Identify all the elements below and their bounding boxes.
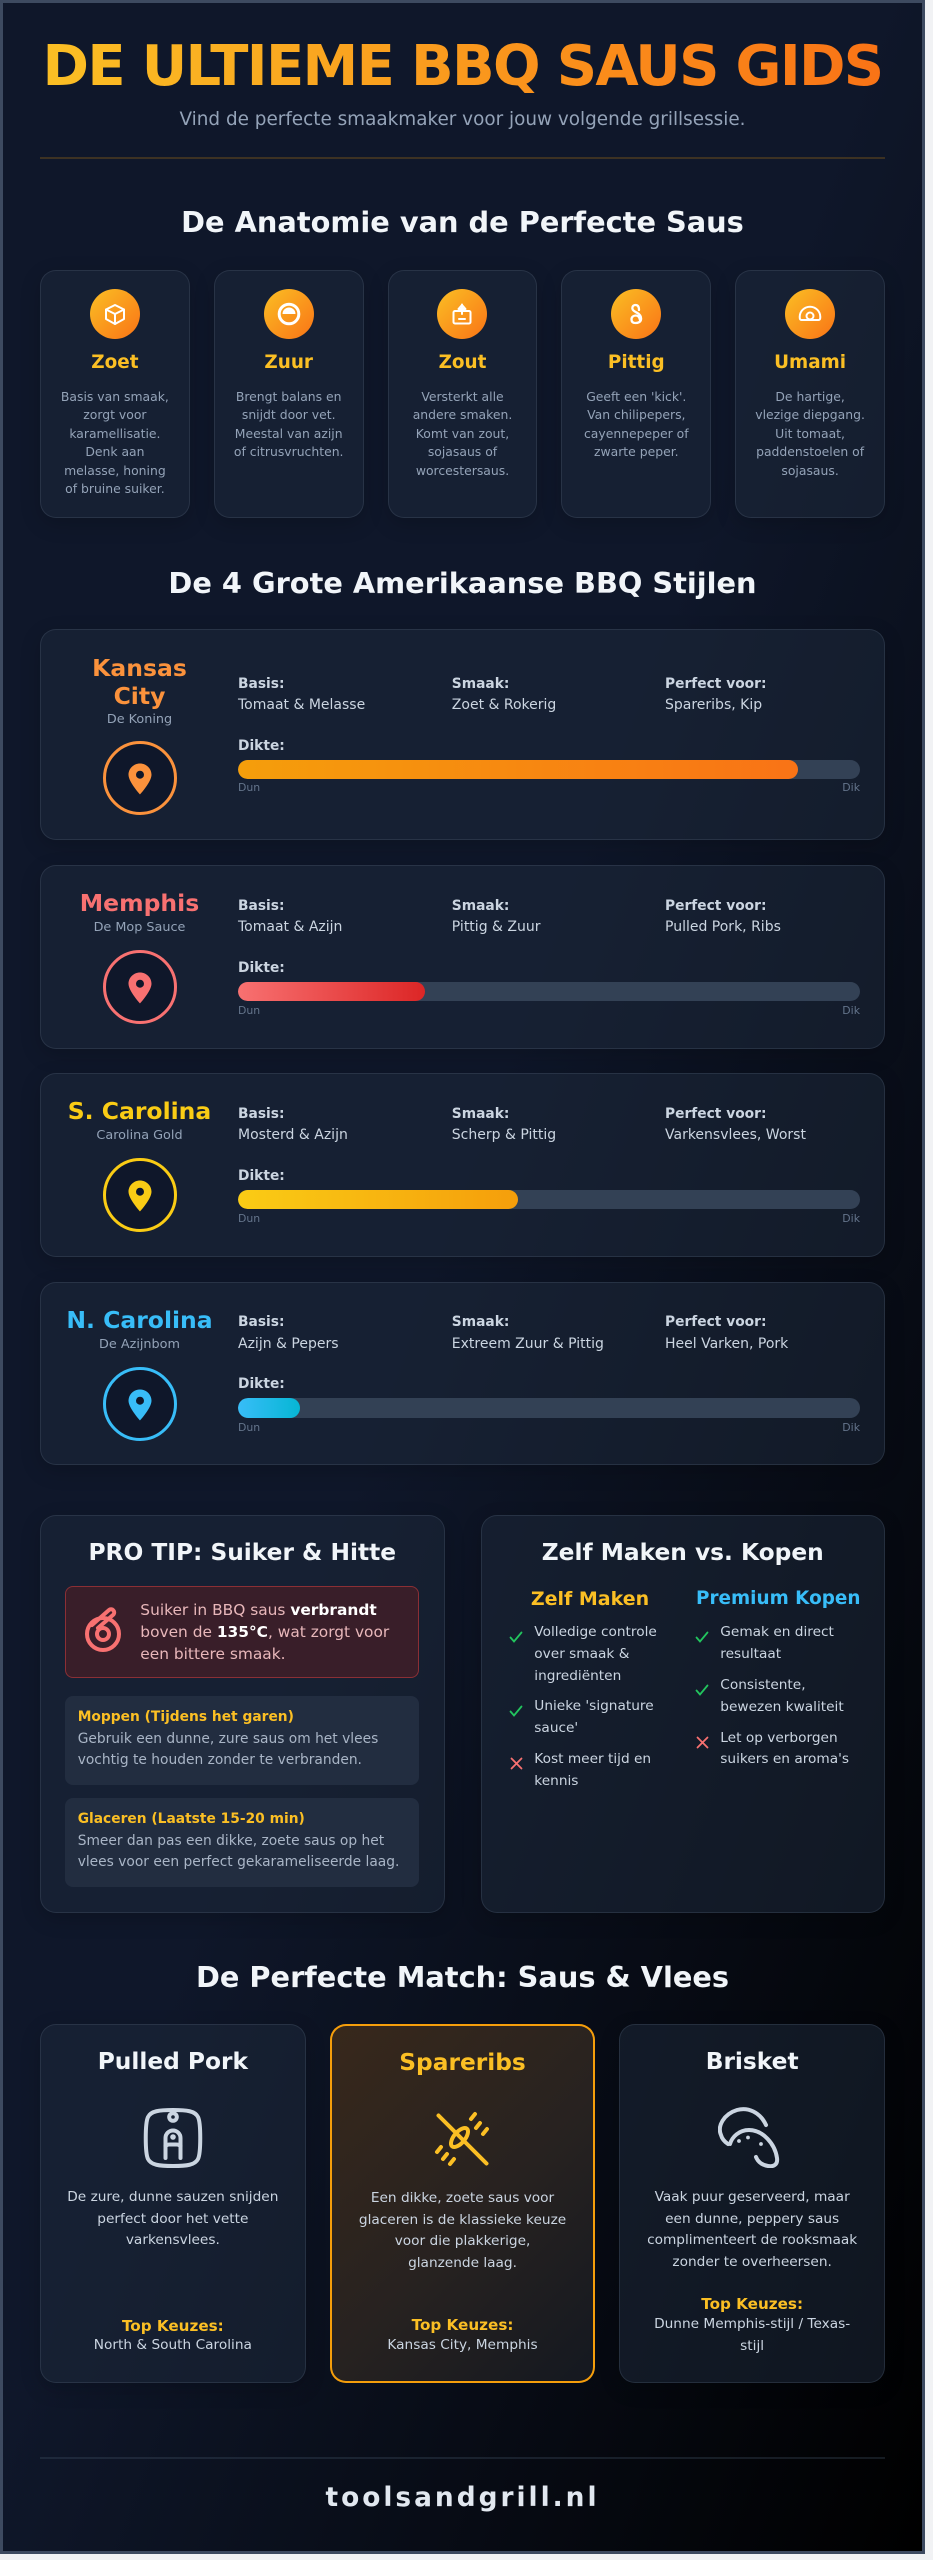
- panel: Memphis: Pulled Pork, Ribs: [665, 919, 781, 935]
- panel: spareribs: Kansas City, Memphis: [387, 2337, 538, 2353]
- panel: South Carolina: Perfect voor:: [665, 1106, 766, 1122]
- heading: styles: De 4 Grote Amerikaanse BBQ Stijlen: [168, 566, 757, 600]
- panel: make vs buy: [480, 1515, 885, 1913]
- panel: Kansas City: Zoet & Rokerig: [452, 697, 556, 713]
- check: [510, 1632, 522, 1643]
- panel: Zuur: of citrusvruchten.: [234, 444, 344, 459]
- panel: South Carolina: Mosterd & Azijn: [238, 1127, 348, 1143]
- column heading: make: Zelf Maken: [531, 1588, 649, 1610]
- icon: pulled pork: [144, 2108, 202, 2168]
- panel: pulled pork: [40, 2024, 306, 2383]
- callout text: [140, 1601, 390, 1663]
- panel: Zuur: [214, 270, 364, 518]
- panel: Memphis: Dun: [238, 1004, 260, 1017]
- panel: Memphis: Dik: [842, 1004, 860, 1017]
- style name: [92, 654, 187, 710]
- panel: Umami: Uit tomaat,: [775, 426, 845, 441]
- panel: Zoet: melasse, honing: [64, 463, 166, 478]
- panel: Memphis: Smaak:: [452, 898, 509, 914]
- panel: Memphis: Dikte:: [238, 960, 285, 976]
- panel: Zout: Zout: [439, 352, 486, 373]
- panel: North Carolina: Dun: [238, 1421, 260, 1434]
- panel: North Carolina: Basis:: [238, 1314, 284, 1330]
- list: buy: [696, 1624, 849, 1767]
- thickness bar: [238, 760, 860, 779]
- panel: brisket: Brisket: [706, 2048, 799, 2075]
- panel: Memphis: De Mop Sauce: [94, 920, 185, 935]
- style name: Memphis: [80, 889, 199, 917]
- panel: Kansas City: De Koning: [107, 712, 172, 727]
- panel: Zoet: of bruine suiker.: [65, 481, 165, 496]
- icon: cube: [90, 289, 140, 339]
- panel: Zuur: Zuur: [264, 352, 313, 373]
- panel: Zout: andere smaken.: [413, 407, 512, 422]
- panel: North Carolina: Dik: [842, 1421, 860, 1434]
- icon: pin: [103, 1367, 177, 1441]
- panel: Umami: Umami: [774, 352, 846, 373]
- panel: Zout: worcestersaus.: [416, 463, 509, 478]
- list: buy: bewezen kwaliteit: [720, 1699, 844, 1715]
- panel: South Carolina: Dik: [842, 1212, 860, 1225]
- tip: mopping: [65, 1696, 419, 1785]
- panel: North Carolina: Heel Varken, Pork: [665, 1336, 788, 1352]
- check: [510, 1706, 522, 1717]
- list: buy: Gemak en direct: [720, 1624, 834, 1640]
- panel: North Carolina: Dikte:: [238, 1376, 285, 1392]
- panel: spareribs: Een dikke, zoete saus voor: [371, 2190, 554, 2206]
- panel: spareribs: Top Keuzes:: [412, 2316, 513, 2334]
- panel: Zuur: Meestal van azijn: [235, 426, 343, 441]
- column heading: buy: Premium Kopen: [696, 1588, 860, 1609]
- callout text: Suiker in BBQ saus verbrandt: [140, 1601, 377, 1619]
- panel: North Carolina: [40, 1282, 885, 1465]
- panel: brisket: Vaak puur geserveerd, maar: [655, 2189, 850, 2205]
- panel: Umami: De hartige,: [775, 389, 845, 404]
- style name: N. Carolina: [66, 1306, 213, 1334]
- list: buy: suikers en aroma's: [720, 1751, 849, 1767]
- icon: brisket: [718, 2107, 780, 2168]
- check: [696, 1632, 708, 1643]
- panel: South Carolina: Varkensvlees, Worst: [665, 1127, 806, 1143]
- panel: Umami: sojasaus.: [781, 463, 839, 478]
- panel: Pittig: Pittig: [608, 352, 665, 373]
- panel: Kansas City: Dik: [842, 781, 860, 794]
- title: DE ULTIEME BBQ SAUS GIDS: [43, 34, 882, 99]
- panel: Umami: vlezige diepgang.: [755, 407, 865, 422]
- icon: shaker: [437, 289, 487, 339]
- panel: North Carolina: Perfect voor:: [665, 1314, 766, 1330]
- panel: Zoet: Basis van smaak,: [61, 389, 169, 404]
- panel: pulled pork: perfect door het vette: [97, 2211, 248, 2227]
- panel: Umami: [735, 270, 885, 518]
- icon: ring: [264, 289, 314, 339]
- panel: South Carolina: [40, 1073, 885, 1257]
- panel: Umami: paddenstoelen of: [756, 444, 864, 459]
- panel: North Carolina: Smaak:: [452, 1314, 509, 1330]
- panel: brisket: een dunne, peppery saus: [665, 2211, 839, 2227]
- panel: Pittig: cayennepeper of: [584, 426, 689, 441]
- panel: spareribs: voor die plakkerige,: [395, 2233, 530, 2249]
- panel: Pittig: Geeft een 'kick'.: [586, 389, 686, 404]
- list: make: Volledige controle: [534, 1624, 657, 1640]
- list: make: [510, 1624, 657, 1789]
- list: make: over smaak &: [534, 1646, 629, 1662]
- panel: Kansas City: Basis:: [238, 676, 284, 692]
- panel: Memphis: Perfect voor:: [665, 898, 766, 914]
- footer brand: toolsandgrill.nl: [325, 2482, 600, 2513]
- check: [696, 1684, 708, 1696]
- tip: glazing: vlees voor een perfect gekarameliseerde laag.: [78, 1854, 399, 1870]
- panel: Pittig: zwarte peper.: [594, 444, 679, 459]
- panel: spareribs: glanzende laag.: [408, 2255, 517, 2271]
- tip: glazing: [65, 1798, 419, 1887]
- panel: North Carolina: Extreem Zuur & Pittig: [452, 1336, 604, 1352]
- panel: Zout: sojasaus of: [428, 444, 497, 459]
- tip: glazing: Glaceren (Laatste 15-20 min): [78, 1811, 305, 1827]
- panel: Zoet: Zoet: [91, 352, 139, 373]
- panel: spareribs: glaceren is de klassieke keuze: [359, 2212, 566, 2228]
- panel: Kansas City: Dun: [238, 781, 260, 794]
- panel: pulled pork: Pulled Pork: [98, 2048, 248, 2075]
- panel: Memphis: [40, 865, 885, 1049]
- icon: pin: [103, 1158, 177, 1232]
- list: make: kennis: [534, 1773, 578, 1789]
- pro tip heading: PRO TIP: Suiker & Hitte: [88, 1539, 396, 1566]
- icon: pin: [103, 741, 177, 815]
- panel: brisket: complimenteert de rooksmaak: [647, 2232, 857, 2248]
- panel: brisket: zonder te overheersen.: [672, 2254, 832, 2270]
- tip: glazing: Smeer dan pas een dikke, zoete saus op het: [78, 1833, 384, 1849]
- icon: mushroom: [785, 289, 835, 339]
- subtitle: Vind de perfecte smaakmaker voor jouw volgende grillsessie.: [179, 109, 746, 130]
- panel: Kansas City: Perfect voor:: [665, 676, 766, 692]
- tip: mopping: vochtig te houden zonder te verbranden.: [78, 1752, 362, 1768]
- panel: North Carolina: De Azijnbom: [99, 1336, 180, 1352]
- panel: South Carolina: Smaak:: [452, 1106, 509, 1122]
- list: make: sauce': [534, 1720, 578, 1736]
- panel: South Carolina: Scherp & Pittig: [452, 1127, 556, 1143]
- heading: anatomy: De Anatomie van de Perfecte Saus: [181, 205, 744, 239]
- icon: ribs: [434, 2112, 490, 2166]
- panel: Zout: Versterkt alle: [421, 389, 504, 404]
- list: buy: Let op verborgen: [720, 1730, 838, 1746]
- list: make: Unieke 'signature: [534, 1698, 654, 1714]
- panel: Kansas City: Dikte:: [238, 738, 285, 754]
- cross: [510, 1758, 522, 1770]
- callout text: een bittere smaak.: [140, 1645, 286, 1663]
- panel: Memphis: Pittig & Zuur: [452, 919, 540, 935]
- panel: Pittig: [561, 270, 711, 518]
- panel: brisket: [619, 2024, 885, 2383]
- panel: pulled pork: Top Keuzes:: [122, 2317, 224, 2335]
- panel: South Carolina: Dikte:: [238, 1168, 285, 1184]
- list: buy: resultaat: [720, 1646, 781, 1662]
- list: buy: Consistente,: [720, 1677, 806, 1693]
- icon: chili: [611, 289, 661, 339]
- panel: Zout: [388, 270, 537, 518]
- panel: South Carolina: Carolina Gold: [96, 1128, 183, 1143]
- style name: S. Carolina: [68, 1097, 211, 1125]
- thickness bar: [238, 1398, 860, 1418]
- panel: Zoet: zorgt voor: [83, 407, 146, 422]
- panel: pulled pork: De zure, dunne sauzen snijden: [67, 2189, 278, 2205]
- panel: Zuur: Brengt balans en: [236, 389, 342, 404]
- panel: South Carolina: Dun: [238, 1212, 260, 1225]
- panel: Kansas City: Smaak:: [452, 676, 509, 692]
- panel: Zoet: Denk aan: [85, 444, 144, 459]
- panel: brisket: Top Keuzes:: [701, 2295, 803, 2313]
- panel: Memphis: Basis:: [238, 898, 284, 914]
- heading: match: De Perfecte Match: Saus & Vlees: [196, 1960, 729, 1994]
- panel: North Carolina: Azijn & Pepers: [238, 1336, 339, 1352]
- panel: Zoet: [40, 270, 190, 518]
- list: make: ingrediënten: [534, 1668, 621, 1684]
- panel: pulled pork: North & South Carolina: [94, 2337, 252, 2353]
- thickness bar: [238, 982, 860, 1001]
- icon: burner: [85, 1607, 121, 1652]
- callout: burning sugar: [65, 1586, 419, 1678]
- panel: Zoet: karamellisatie.: [69, 426, 160, 441]
- panel: Kansas City: Spareribs, Kip: [665, 697, 762, 713]
- panel: spareribs: Spareribs: [399, 2049, 526, 2076]
- panel: brisket: Dunne Memphis-stijl / Texas-: [654, 2316, 850, 2332]
- panel: spareribs: [330, 2024, 595, 2383]
- panel: Pittig: Van chilipepers,: [587, 407, 685, 422]
- panel: South Carolina: Basis:: [238, 1106, 284, 1122]
- panel: pulled pork: varkensvlees.: [126, 2232, 220, 2248]
- callout text: boven de 135°C, wat zorgt voor: [140, 1623, 389, 1641]
- style name: Kansas: [92, 654, 187, 682]
- panel: Zuur: snijdt door vet.: [242, 407, 336, 422]
- make vs buy heading: Zelf Maken vs. Kopen: [542, 1539, 824, 1566]
- panel: brisket: stijl: [740, 2338, 764, 2354]
- panel: Zout: Komt van zout,: [416, 426, 509, 441]
- thickness bar: [238, 1190, 860, 1209]
- panel: Kansas City: Tomaat & Melasse: [238, 697, 365, 713]
- cross: [696, 1736, 708, 1748]
- tip: mopping: Moppen (Tijdens het garen): [78, 1709, 294, 1725]
- list: make: Kost meer tijd en: [534, 1751, 651, 1767]
- icon: pin: [103, 950, 177, 1024]
- tip: mopping: Gebruik een dunne, zure saus om het vlees: [78, 1731, 378, 1747]
- panel: Memphis: Tomaat & Azijn: [238, 919, 342, 935]
- panel: Kansas City: [40, 629, 885, 840]
- style name: City: [114, 682, 165, 710]
- panel: pro tip: [40, 1515, 444, 1913]
